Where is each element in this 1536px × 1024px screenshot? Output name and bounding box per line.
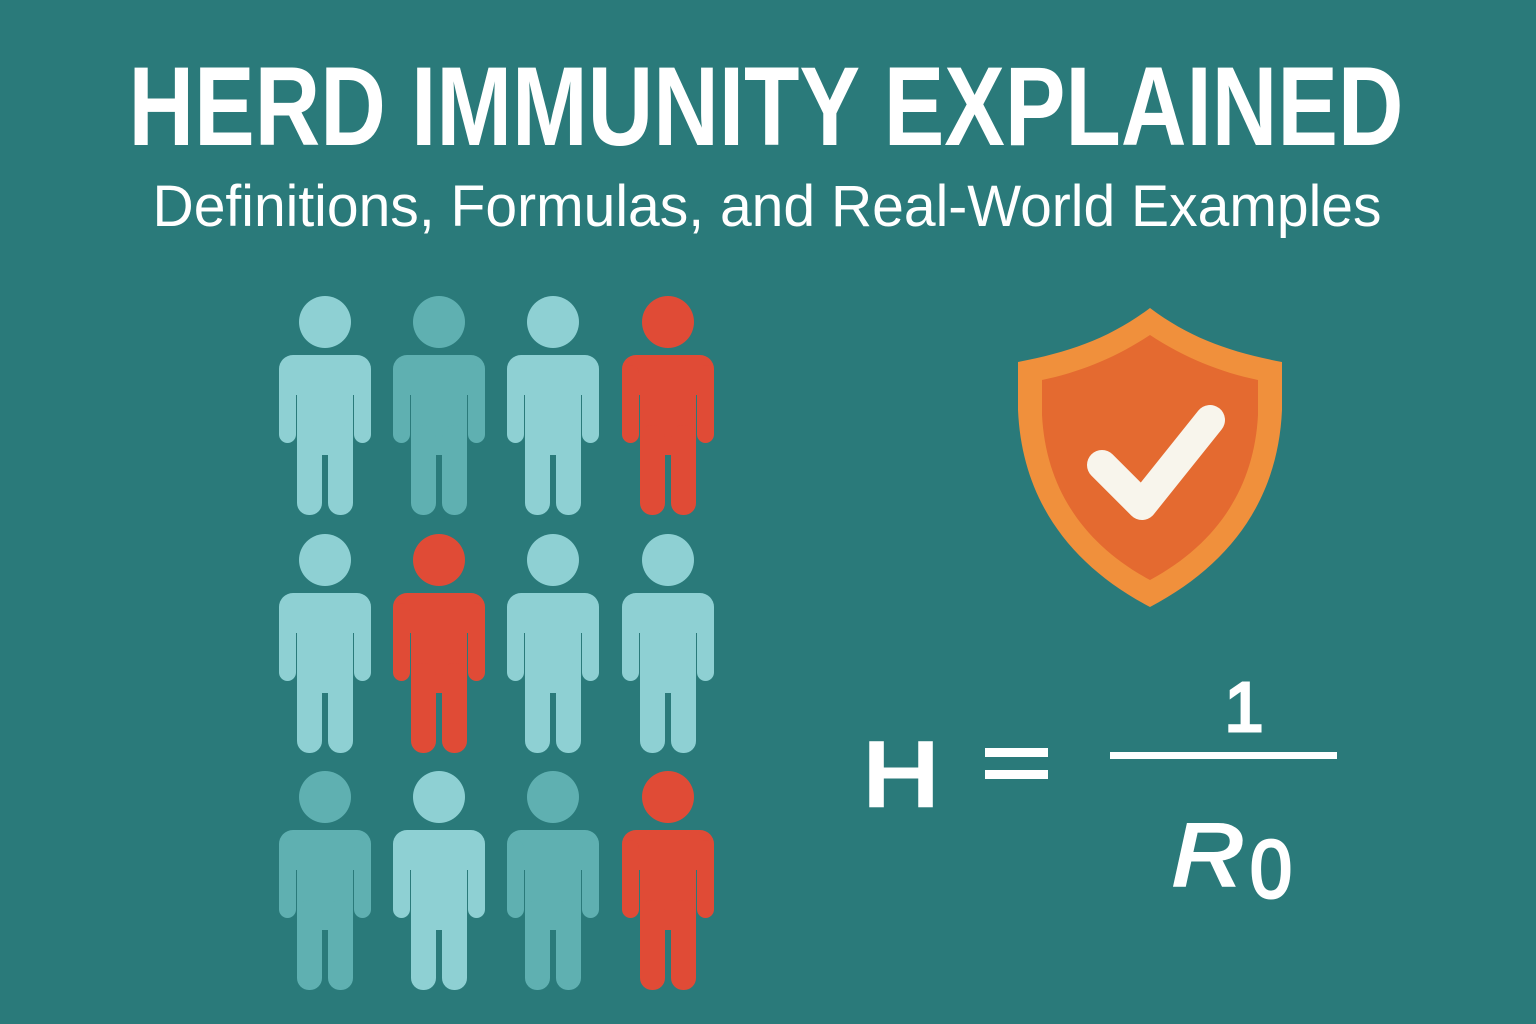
formula: H = 1/R0: R: [1172, 805, 1244, 904]
person row2 col4: [622, 534, 714, 753]
person row1 col3: [507, 296, 599, 515]
person row3 col2: [393, 771, 485, 990]
subtitle: Definitions, Formulas, and Real-World Examples: [152, 174, 1382, 239]
person row2 col2 infected: [393, 534, 485, 753]
formula: H = 1/R0: [863, 668, 1337, 915]
person row1 col4 infected: [622, 296, 714, 515]
formula: H = 1/R0: 0: [1250, 824, 1292, 915]
formula: H = 1/R0: 1: [1225, 668, 1263, 746]
person row1 col1: [279, 296, 371, 515]
person row3 col1: [279, 771, 371, 990]
person row2 col1: [279, 534, 371, 753]
person row1 col2: [393, 296, 485, 515]
person row2 col3: [507, 534, 599, 753]
person row3 col3: [507, 771, 599, 990]
people grid: [279, 296, 714, 990]
icon: shield with check: [1018, 308, 1282, 607]
formula: H = 1/R0: H: [863, 725, 939, 825]
person row3 col4 infected: [622, 771, 714, 990]
